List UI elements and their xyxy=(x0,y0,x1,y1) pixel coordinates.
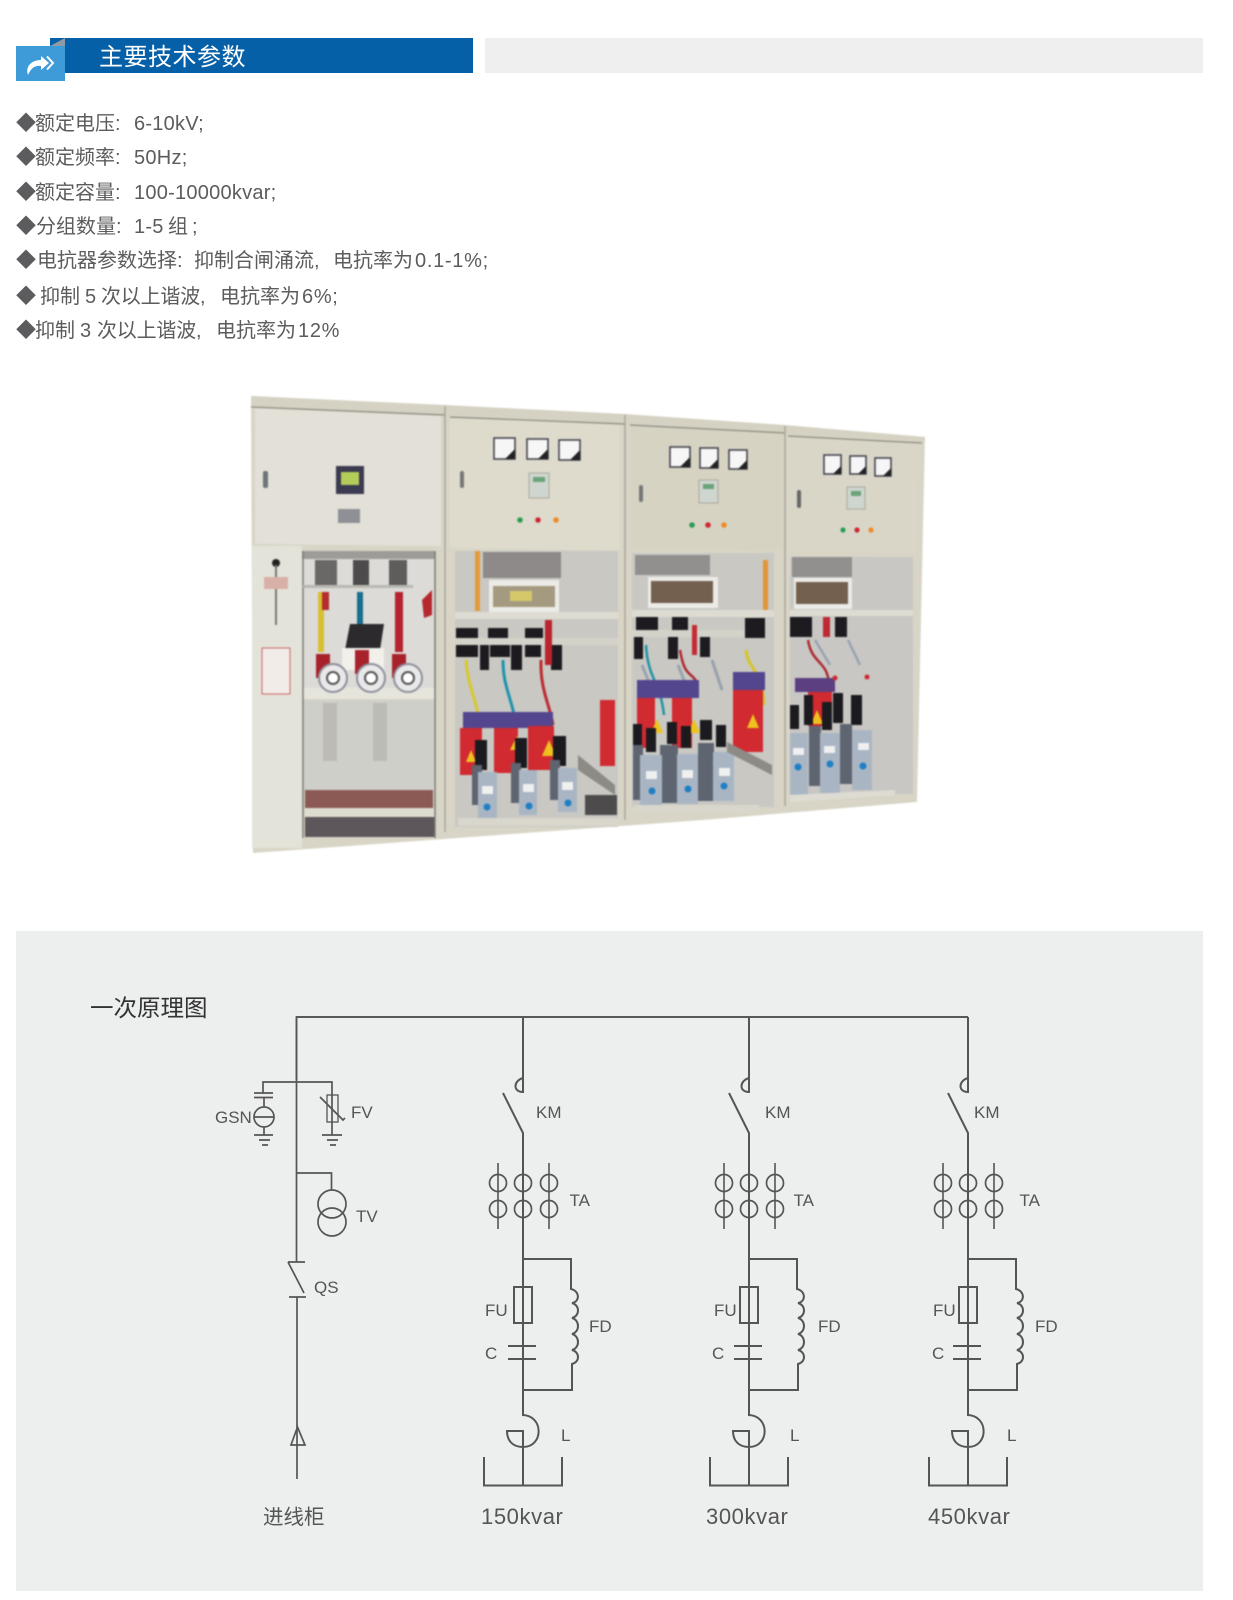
component labels: GSN xyxy=(215,1108,252,1127)
header grey bar xyxy=(485,38,1203,73)
schematic title: 一次原理图 xyxy=(90,995,208,1021)
spec: third harmonic: 次以上谐波, xyxy=(97,320,201,342)
component labels: TA xyxy=(794,1191,815,1210)
panel 1: incoming cabinet xyxy=(252,408,441,848)
component labels: L xyxy=(561,1426,570,1445)
main bus xyxy=(296,1017,968,1080)
component labels: QS xyxy=(314,1278,339,1297)
spec: rated voltage: ◆ xyxy=(16,113,36,135)
component labels: FU xyxy=(485,1301,508,1320)
spec list xyxy=(16,112,489,342)
cabinet body xyxy=(251,396,925,853)
branch captions: 300kvar xyxy=(706,1504,788,1529)
spec: fifth harmonic: 5 xyxy=(85,286,96,308)
branch captions xyxy=(263,1504,1010,1529)
spec: reactor parameters: 0.1-1%; xyxy=(415,250,489,272)
spec: rated capacity: 额定容量: xyxy=(35,182,121,204)
spec: third harmonic: 12% xyxy=(298,320,340,342)
panel 2: compensation branch xyxy=(450,418,620,827)
component labels: KM xyxy=(765,1103,790,1122)
spec: group count xyxy=(16,216,198,238)
spec: rated voltage: 额定电压: xyxy=(35,113,121,135)
spec: third harmonic: 抑制 xyxy=(35,320,75,342)
component labels: FD xyxy=(589,1317,612,1336)
panel: primary schematic xyxy=(16,931,1203,1591)
panel 4: compensation branch xyxy=(788,437,918,802)
spec: group count: ◆ xyxy=(16,216,36,238)
spec: third harmonic: 电抗率为 xyxy=(216,320,296,342)
spec: rated voltage xyxy=(16,112,204,135)
component labels: FU xyxy=(714,1301,737,1320)
spec: third harmonic: 3 xyxy=(80,320,91,342)
header blue bar xyxy=(50,38,473,73)
component labels xyxy=(215,1103,1058,1445)
arrester GSN xyxy=(254,1093,274,1145)
component labels: FU xyxy=(933,1301,956,1320)
spec: fifth harmonic: 电抗率为 xyxy=(220,286,300,308)
spec: group count: 1-5 xyxy=(134,216,164,238)
component labels: L xyxy=(1007,1426,1016,1445)
component labels: TA xyxy=(1020,1191,1041,1210)
spec: rated capacity: ◆ xyxy=(16,182,36,204)
component labels: TA xyxy=(570,1191,591,1210)
spec: reactor parameters xyxy=(16,250,489,272)
component labels: C xyxy=(485,1344,497,1363)
spec: group count: 组 xyxy=(168,216,188,238)
meters xyxy=(494,438,580,460)
spec: rated frequency: ◆ xyxy=(16,147,36,169)
spec: rated voltage: 6-10kV; xyxy=(134,113,204,135)
component labels: FD xyxy=(1035,1317,1058,1336)
spec: rated frequency: 50Hz; xyxy=(134,147,188,169)
component labels: FD xyxy=(818,1317,841,1336)
disconnect QS xyxy=(288,1262,306,1479)
component labels: KM xyxy=(974,1103,1000,1122)
branch: 150kvar xyxy=(484,1017,578,1486)
spec: fifth harmonic: 6%; xyxy=(302,286,339,308)
spec: rated frequency xyxy=(16,146,188,169)
panel 3: compensation branch xyxy=(630,426,783,813)
branch: 450kvar xyxy=(929,1017,1023,1486)
component labels: KM xyxy=(536,1103,562,1122)
heading: 主要技术参数 xyxy=(99,44,246,71)
component labels: C xyxy=(932,1344,944,1363)
transformer TV xyxy=(296,1173,346,1236)
component labels: TV xyxy=(356,1207,378,1226)
spec: fifth harmonic: 次以上谐波, xyxy=(101,286,205,308)
spec: rated capacity: 100-10000kvar; xyxy=(134,182,276,204)
branch captions: 150kvar xyxy=(481,1504,563,1529)
spec: rated frequency: 额定频率: xyxy=(35,147,121,169)
arrester FV xyxy=(320,1095,345,1145)
arrow: incoming xyxy=(291,1427,305,1445)
spec: group count: ; xyxy=(192,216,198,238)
branch captions: 进线柜 xyxy=(263,1506,324,1529)
interior xyxy=(475,551,480,611)
spec: rated capacity xyxy=(16,182,276,204)
incoming branch xyxy=(254,1017,346,1479)
icon: fold corner xyxy=(50,38,65,46)
component labels: FV xyxy=(351,1103,373,1122)
spec: fifth harmonic xyxy=(16,286,339,308)
meters xyxy=(670,447,747,469)
section header xyxy=(16,38,1203,81)
icon: arrow badge xyxy=(16,46,65,81)
spec: reactor parameters: 电抗率为 xyxy=(333,250,413,272)
spec: third harmonic: ◆ xyxy=(16,320,36,342)
meters xyxy=(824,455,891,476)
photo: capacitor switchgear cabinet xyxy=(250,395,926,854)
branch: 300kvar xyxy=(710,1017,804,1486)
component labels: L xyxy=(790,1426,799,1445)
spec: reactor parameters: 抑制合闸涌流, xyxy=(194,250,320,272)
spec: fifth harmonic: ◆ xyxy=(16,286,36,308)
spec: reactor parameters: ◆ xyxy=(16,250,36,272)
branch captions: 450kvar xyxy=(928,1504,1010,1529)
spec: reactor parameters: 电抗器参数选择: xyxy=(37,250,183,272)
spec: third harmonic xyxy=(16,320,340,342)
spec: fifth harmonic: 抑制 xyxy=(40,286,80,308)
spec: group count: 分组数量: xyxy=(36,216,122,238)
component labels: C xyxy=(712,1344,724,1363)
